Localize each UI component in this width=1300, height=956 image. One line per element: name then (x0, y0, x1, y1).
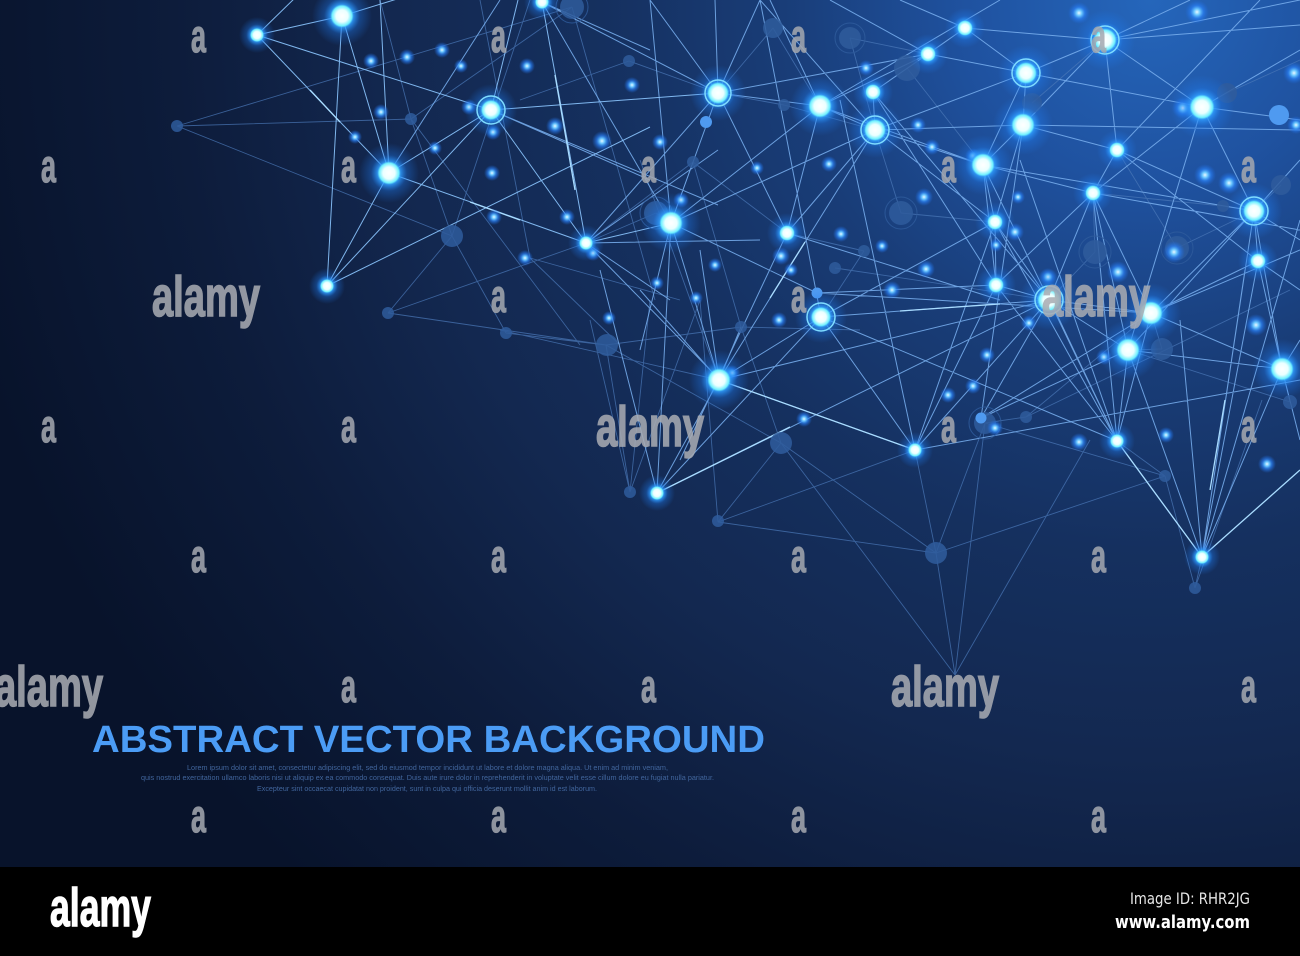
watermark words: alamy (152, 265, 260, 329)
watermark letters: a (191, 10, 206, 62)
image id: Image ID: RHR2JG (1130, 889, 1250, 908)
network lines: left cluster bright (257, 0, 718, 286)
watermark letters: a (791, 10, 806, 62)
network lines: medium (389, 0, 1300, 557)
watermark letters: a (191, 530, 206, 582)
watermark words: alamy (596, 395, 704, 459)
watermark letters: a (341, 400, 356, 452)
bright network nodes (239, 0, 1300, 575)
watermark letters: a (941, 400, 956, 452)
network lines: bright highlights (310, 75, 1300, 557)
website: www.alamy.com (1115, 912, 1250, 933)
watermark words: alamy (891, 655, 999, 719)
watermark letters: a (491, 10, 506, 62)
watermark letters: a (491, 270, 506, 322)
watermark letters: a (641, 140, 656, 192)
watermark letters: a (491, 790, 506, 842)
watermark letters: a (191, 790, 206, 842)
watermark letters: a (341, 660, 356, 712)
body text (141, 765, 714, 793)
watermark letters: a (41, 140, 56, 192)
footer bar (0, 867, 1300, 956)
watermark letters: a (641, 660, 656, 712)
watermark letters: a (1241, 400, 1256, 452)
watermark letters: a (1091, 10, 1106, 62)
watermark letters: a (1091, 530, 1106, 582)
watermark letters: a (41, 400, 56, 452)
title: ABSTRACT VECTOR BACKGROUND (92, 719, 765, 761)
watermark letters: a (941, 140, 956, 192)
body text: Lorem ipsum dolor sit amet, consectetur adipiscing elit, sed do eiusmod tempor incididunt ut labore et dolore magna aliqua. Ut enim ad minim veniam, (187, 765, 668, 772)
watermark words: alamy (1042, 265, 1150, 329)
watermark letters: a (791, 530, 806, 582)
small glowing dots (348, 0, 1300, 473)
watermark letters: a (1091, 790, 1106, 842)
watermark letters: a (791, 270, 806, 322)
watermark letters: a (491, 530, 506, 582)
watermark letters: a (341, 140, 356, 192)
watermark letters: a (791, 790, 806, 842)
dim network nodes (171, 0, 1297, 594)
footer logo: alamy (50, 878, 151, 938)
body text: Excepteur sint occaecat cupidatat non proident, sunt in culpa qui officia deserunt mollit anim id est laborum. (257, 786, 597, 793)
bright node rings (477, 26, 1268, 331)
watermark letters: a (1241, 660, 1256, 712)
watermark words (0, 265, 1150, 719)
network lines: dim (177, 0, 1300, 675)
dim node rings (556, 0, 1193, 439)
body text: quis nostrud exercitation ullamco laboris nisi ut aliquip ex ea commodo consequat. Duis aute irure dolor in reprehenderit in voluptate velit esse cillum dolore eu fugiat nulla pariatur. (141, 775, 714, 782)
watermark letters: a (1241, 140, 1256, 192)
light blue nodes (700, 105, 1289, 424)
